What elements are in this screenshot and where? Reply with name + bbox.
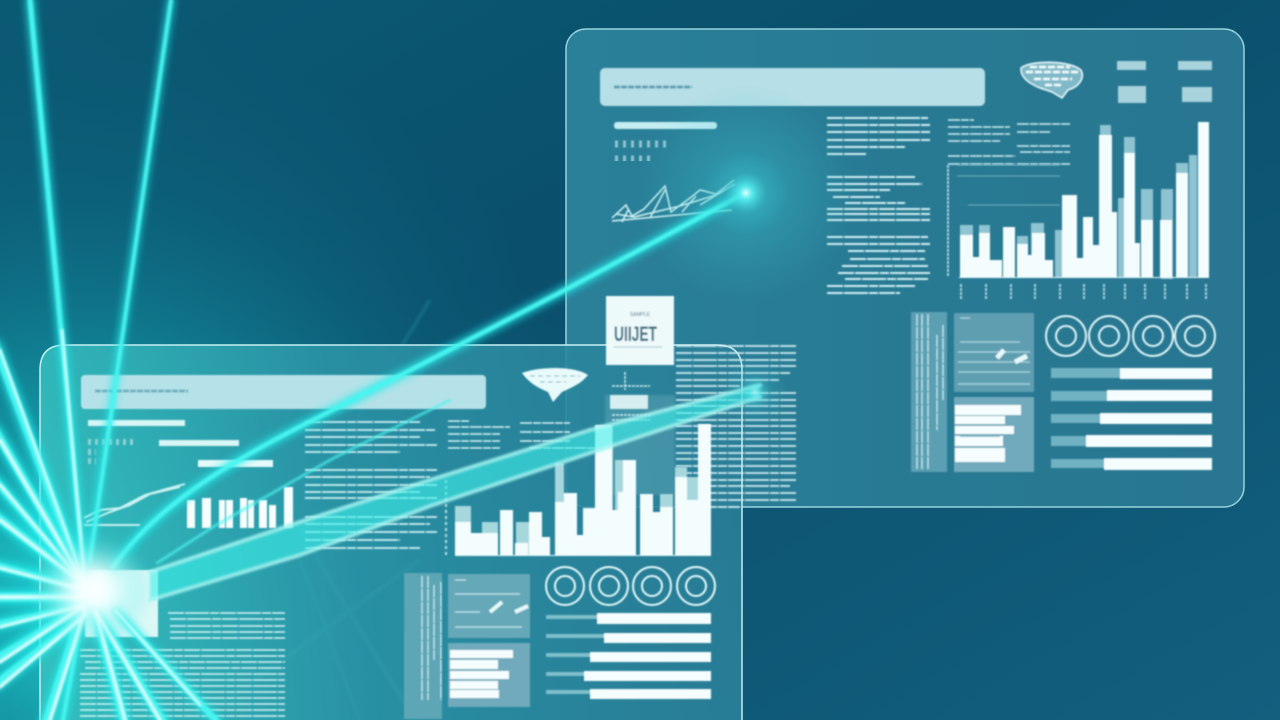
main beam edges bbox=[150, 385, 760, 600]
glow around beam tip bbox=[636, 83, 856, 303]
line chart bbox=[84, 484, 185, 525]
lower text bbox=[80, 613, 285, 716]
white block at burst bbox=[85, 570, 158, 637]
beam glow bbox=[0, 0, 745, 720]
panel background bbox=[566, 29, 1244, 507]
white report card bbox=[606, 296, 674, 365]
text column bbox=[827, 118, 930, 293]
icon: globe map bbox=[522, 368, 588, 402]
faint bars bbox=[960, 125, 1197, 279]
burst: light source bbox=[30, 534, 154, 646]
white report card: UIIJET bbox=[614, 323, 657, 346]
panel background bbox=[40, 345, 742, 720]
main beam band bbox=[150, 385, 760, 600]
white beam centres bbox=[0, 330, 200, 720]
mini bars bbox=[187, 487, 293, 528]
gridlines bbox=[957, 165, 1060, 205]
info card bottom bbox=[954, 397, 1034, 472]
info card top bbox=[954, 313, 1034, 392]
small labels bbox=[1117, 61, 1212, 103]
label above chart bbox=[610, 372, 650, 420]
ring gauges bbox=[546, 567, 715, 605]
white bars bbox=[960, 122, 1209, 277]
pale lit area bbox=[605, 395, 675, 495]
white bars bbox=[455, 424, 711, 555]
subheading and labels bbox=[614, 122, 717, 159]
beam cores bbox=[0, 0, 745, 720]
header bar bbox=[600, 68, 985, 106]
line chart bbox=[612, 180, 735, 222]
horizontal bars bbox=[1051, 368, 1212, 470]
light beams bbox=[0, 0, 760, 720]
panel: top right dashboard bbox=[566, 29, 1244, 507]
text column bbox=[305, 422, 437, 548]
icon: globe map bbox=[1021, 62, 1082, 98]
text block upper right bbox=[676, 346, 797, 507]
white report card: SAMPLE bbox=[630, 312, 651, 318]
glow spot: beam end upper bbox=[704, 151, 788, 235]
side table bbox=[911, 312, 947, 472]
panel: lower left dashboard bbox=[40, 345, 797, 720]
subheadings bbox=[88, 420, 273, 467]
info card bottom bbox=[448, 643, 530, 707]
glow spot: beam end lower bbox=[721, 358, 789, 426]
bar chart bbox=[948, 122, 1209, 300]
header bar bbox=[81, 375, 486, 409]
bar chart bbox=[446, 424, 711, 556]
horizontal bars bbox=[546, 613, 711, 699]
axis bbox=[959, 276, 1209, 278]
text block above chart bbox=[448, 421, 600, 448]
info card top bbox=[448, 574, 530, 638]
side table bbox=[404, 573, 442, 719]
ring gauges bbox=[1046, 316, 1215, 356]
text block above chart bbox=[948, 120, 1070, 164]
faint background beams bbox=[200, 300, 430, 720]
axis bbox=[455, 554, 711, 556]
faint bars bbox=[455, 425, 699, 555]
